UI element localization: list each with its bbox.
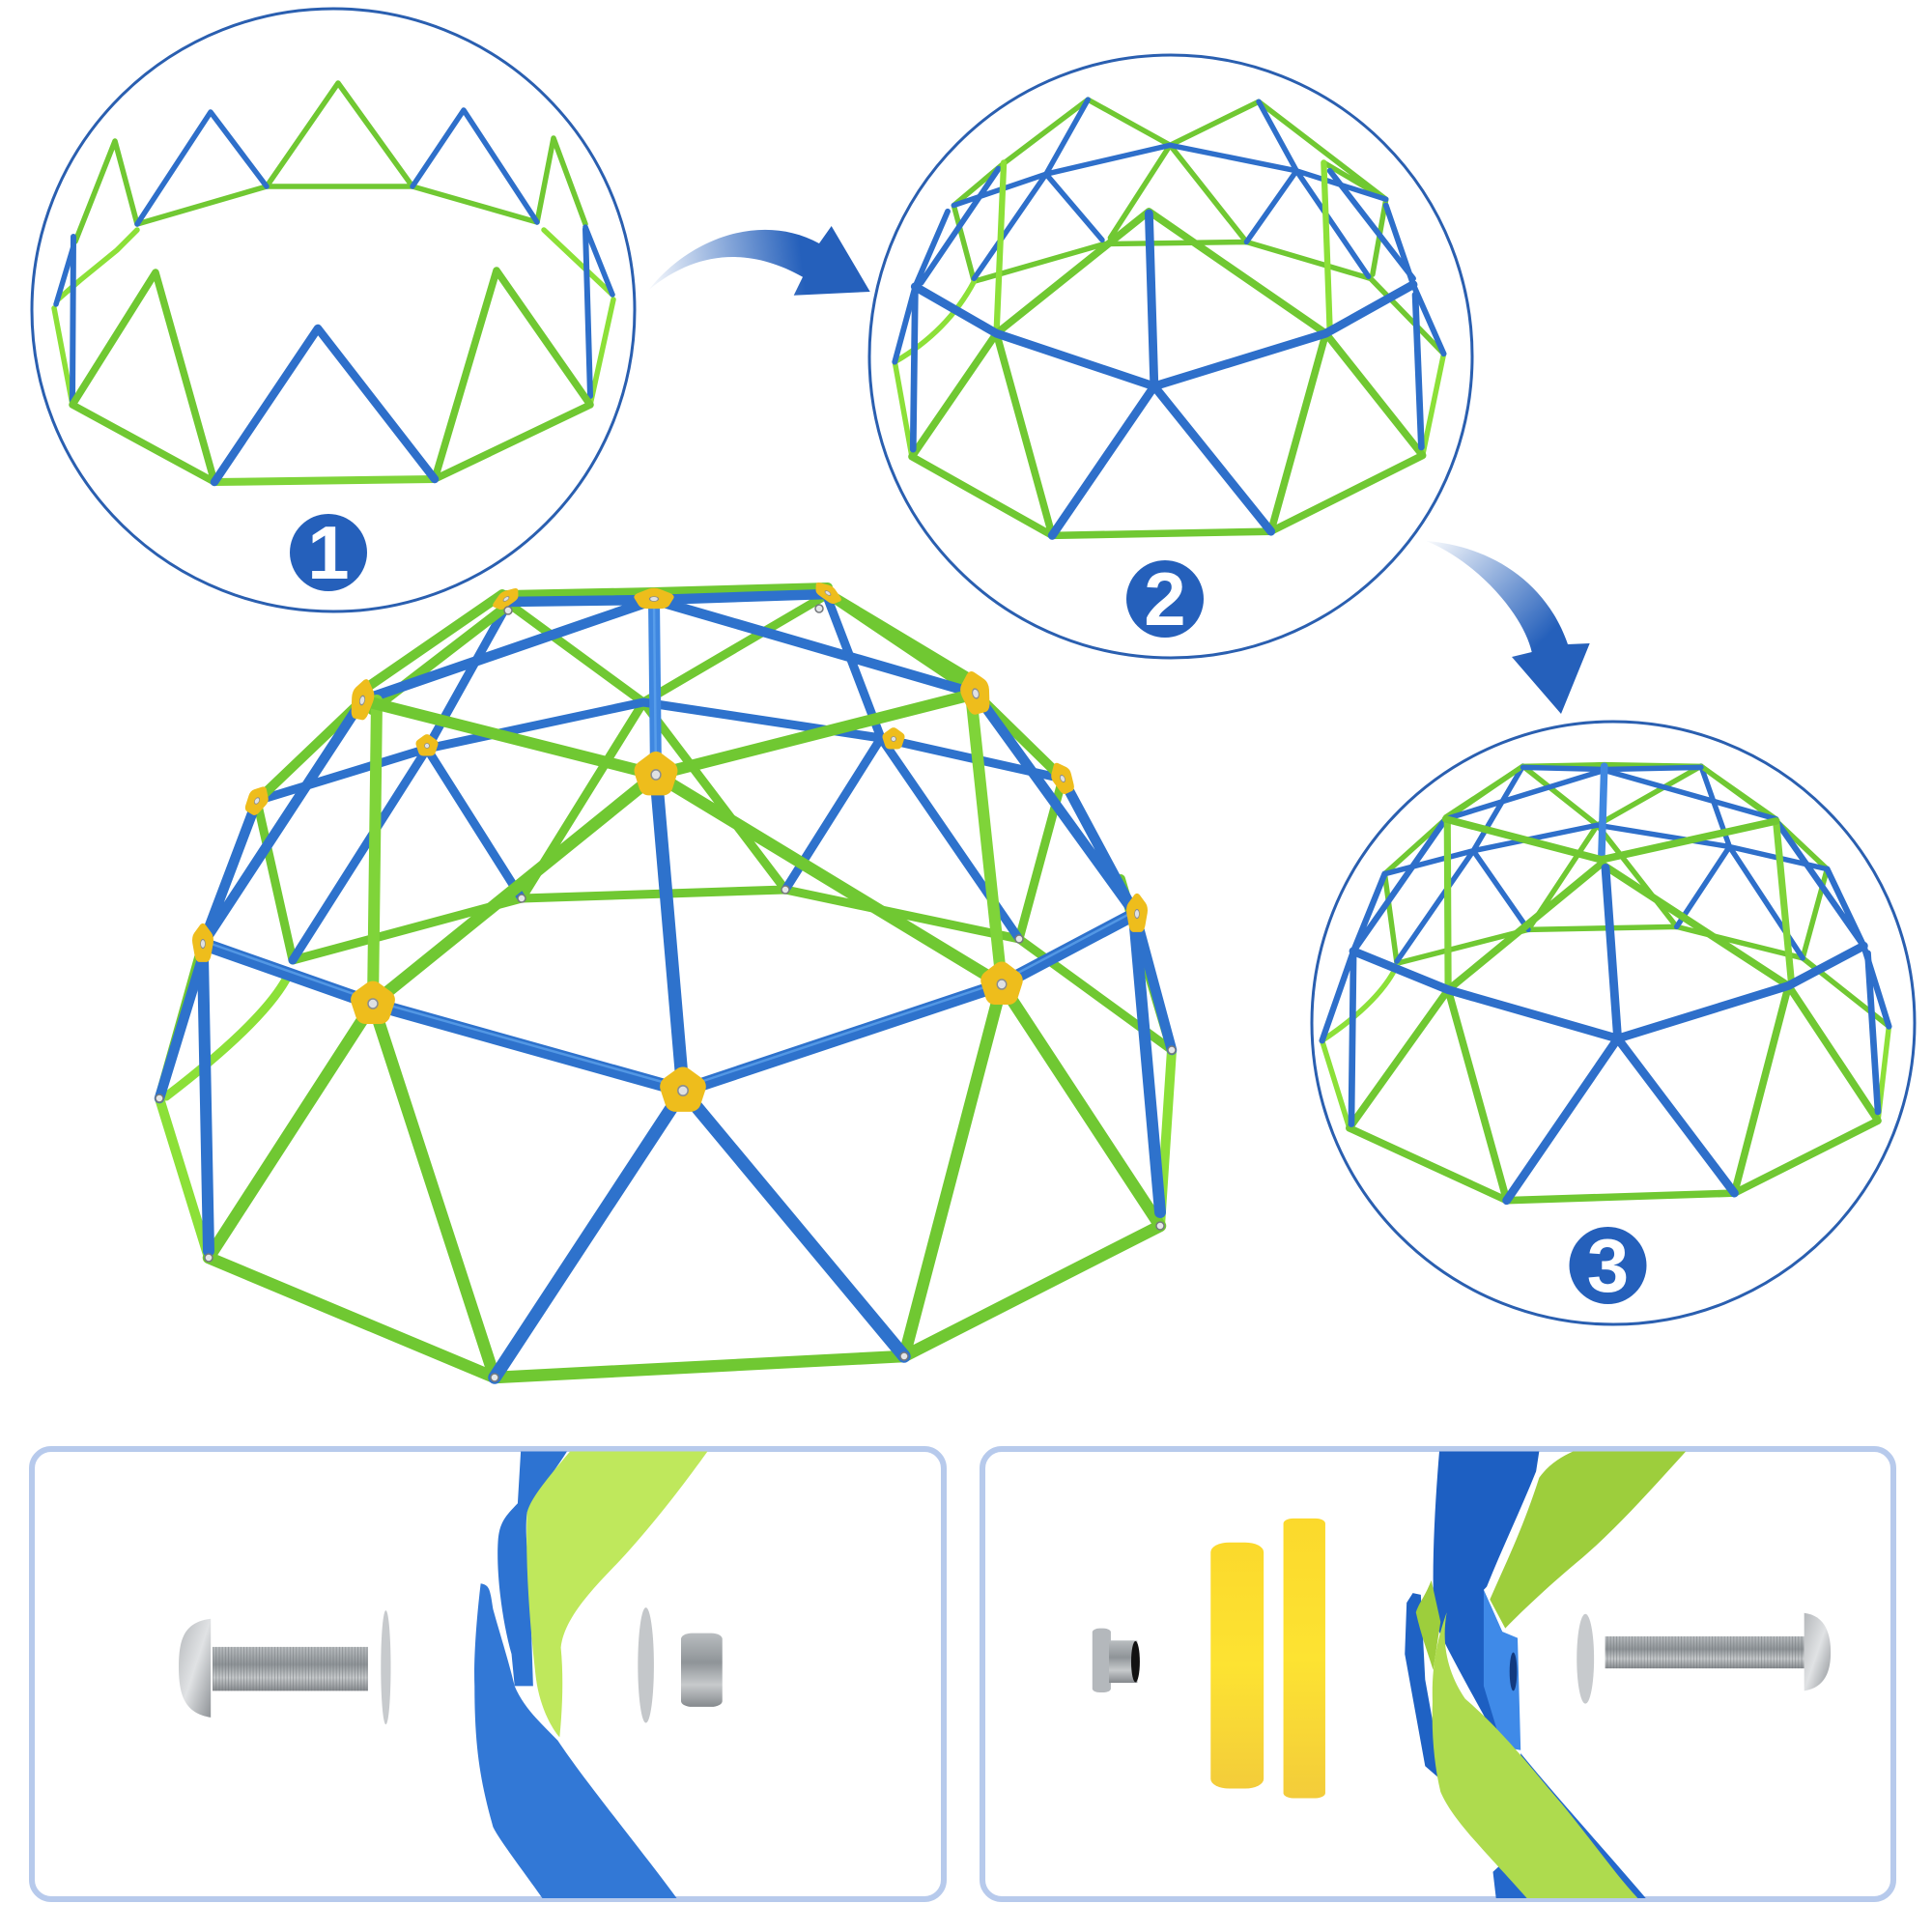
arrow: step 1 to step 2: [649, 226, 870, 296]
bolt head: [179, 1619, 211, 1718]
small silver bolts: [156, 605, 1176, 1381]
top centre strut: [654, 600, 656, 775]
green upper bracket: [1490, 1452, 1686, 1629]
side green struts: [159, 587, 1172, 1098]
panel frame: [982, 1449, 1893, 1899]
bolt shaft: [213, 1647, 368, 1690]
panel: hardware detail, yellow cap: [982, 1449, 1893, 1899]
blue lower bracket: [474, 1583, 677, 1898]
base and lower green struts: [209, 775, 1160, 1378]
blue upper bracket: [1434, 1452, 1539, 1750]
washer: [1577, 1614, 1594, 1704]
yellow disc front: [1284, 1519, 1325, 1798]
front blue ring and struts: [203, 775, 1135, 1378]
step 3 outline: [1312, 722, 1915, 1324]
main assembled dome: [156, 585, 1176, 1381]
green bracket: [526, 1452, 707, 1737]
upper vertical light green struts: [373, 694, 1002, 1004]
light blue plate: [1484, 1590, 1520, 1750]
strut highlights: [203, 604, 1135, 1088]
lock nut: [681, 1634, 723, 1707]
rear lower light green tube: [166, 980, 286, 1096]
step 2 outline: [869, 55, 1472, 658]
yellow knobs: [197, 585, 1143, 1101]
bolt head: [1804, 1613, 1831, 1690]
step 2 badge: 2: [1144, 556, 1186, 641]
green strip left: [1416, 1580, 1440, 1670]
bolt thread: [1605, 1636, 1804, 1668]
washer left: [381, 1610, 390, 1724]
left blue strip: [1405, 1593, 1443, 1782]
blue lower bracket: [1492, 1753, 1646, 1898]
panel: step 1 circle: [32, 9, 635, 611]
left and right blue verticals: [203, 927, 1160, 1251]
cap nut: [1093, 1629, 1140, 1692]
plate hole: [1510, 1653, 1517, 1690]
arrow: step 2 to step 3: [1427, 541, 1590, 714]
rear blue struts: [257, 599, 1063, 960]
step 1 badge: 1: [307, 510, 350, 595]
bolt shaft: [1605, 1636, 1804, 1668]
step 3 badge: 3: [1587, 1223, 1629, 1308]
side blue struts: [159, 694, 1172, 1098]
washer right: [638, 1607, 654, 1723]
yellow disc back: [1210, 1543, 1264, 1789]
blue bracket behind: [497, 1452, 567, 1686]
panel: hardware detail, bolt and nut: [32, 1449, 944, 1899]
panel: step 2 circle: [869, 55, 1472, 658]
step 1 front tier struts: [72, 270, 590, 482]
step 3 badge: [1569, 1223, 1646, 1308]
hardware artwork: [179, 1452, 723, 1898]
panel: step 3 circle: [1312, 722, 1915, 1324]
step 3 dome frame: [1322, 764, 1889, 1201]
step 2 badge: [1126, 556, 1204, 641]
step 2 dome frame: [895, 99, 1444, 535]
panel frame: [32, 1449, 944, 1899]
green lower bracket: [1433, 1612, 1637, 1898]
hardware artwork: [1093, 1452, 1831, 1898]
outer light green legs: [159, 1050, 1172, 1258]
rear green struts: [257, 594, 1172, 1050]
step 1 rear tier struts: [54, 83, 613, 405]
step 1 badge: [290, 510, 367, 595]
upper green ring: [362, 694, 976, 775]
bolt thread: [213, 1647, 368, 1690]
top blue ring and spokes: [362, 594, 976, 700]
step 1 outline: [32, 9, 635, 611]
